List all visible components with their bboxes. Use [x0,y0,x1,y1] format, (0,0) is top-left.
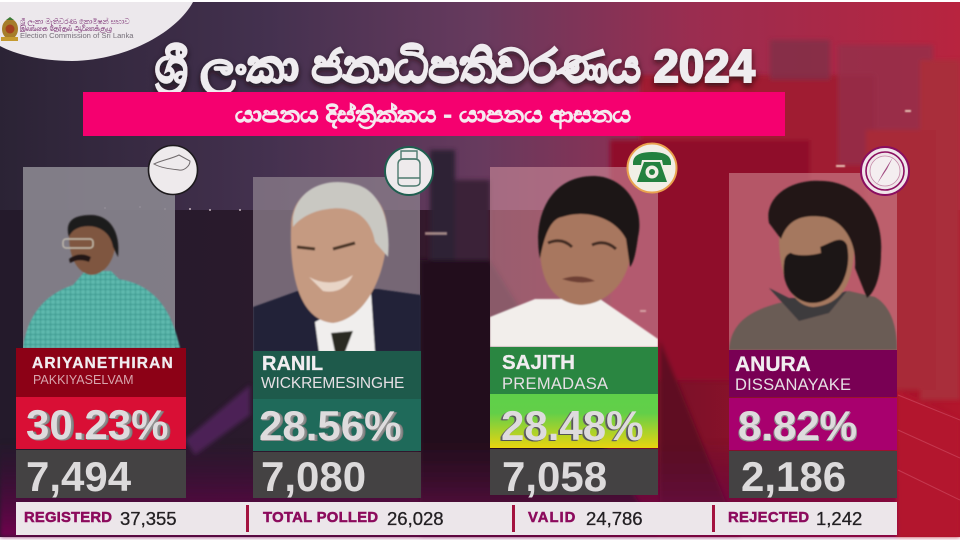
stat: total polled: TOTAL POLLED [263,510,378,526]
stats bar: 26,028 [387,508,444,529]
percentage 28.56%: 28.56% [259,402,401,449]
percentage 8.82%: 8.82% [738,402,857,449]
votes band [490,449,658,495]
stats bar: 1,242 [816,508,862,529]
logo panel: Election Commission [0,2,193,61]
icon: emblem [1,17,18,41]
icon: gas cylinder [384,146,434,196]
portrait: Sajith [490,167,658,347]
icon: telephone [626,142,678,194]
votes band [16,450,186,498]
logo text: இலங்கை தேர்தல் ஆணைக்குழு [20,24,112,33]
name band [729,350,897,397]
stats bar: 37,355 [120,508,177,529]
stat: rejected: REJECTED [728,510,809,526]
logo text: ශ්‍රී ලංකා මැතිවරණ කොමිෂන් සභාව [20,17,130,26]
stat: valid: VALID [528,510,576,526]
stats bar: 24,786 [586,508,643,529]
name band [253,351,421,399]
name: ANURA DISSANAYAKE: ANURA [735,353,811,376]
votes band [729,451,897,498]
percentage band [16,397,186,449]
name band [16,348,186,397]
percentage band [253,399,421,451]
percentage band [729,398,897,450]
portrait: Ariyanethiran [23,167,181,348]
logo text: Election Commission of Sri Lanka [20,31,134,40]
subtitle banner: යාපනය දිස්ත්‍රික්කය - යාපනය ආසනය [235,102,631,130]
title: ශ්‍රී ලංකා ජනාධිපතිවරණය 2024 [155,40,755,96]
stat: registered: REGISTERD [24,510,112,526]
percentage 30.23%: 30.23% [26,401,168,448]
portrait: Anura [729,173,897,350]
icon: compass [860,146,910,196]
votes 7,058: 7,058 [502,453,607,500]
card 2: Ranil: WICKREMESINGHE [261,375,404,392]
card 1: Ariyanethiran: PAKKIYASELVAM [33,373,134,387]
card 3: Sajith: PREMADASA [502,375,608,393]
logo text [20,17,134,40]
card 4: Anura: DISSANAYAKE [735,376,851,394]
horizon lights [104,206,241,211]
percentage band [490,394,658,448]
votes 7,494: 7,494 [26,453,131,500]
votes band [253,452,421,498]
percentage 28.48%: 28.48% [501,402,643,449]
icon: conch shell [148,144,198,196]
name band [490,347,658,394]
votes 7,080: 7,080 [261,453,366,500]
subtitle banner [83,92,785,136]
name: RANIL WICKREMESINGHE: RANIL [262,353,323,375]
name: SAJITH PREMADASA: SAJITH [502,351,575,374]
name: ARIYANETHIRAN PAKKIYASELVAM: ARIYANETHIRAN [32,355,174,372]
portrait: Ranil [253,177,421,351]
votes 2,186: 2,186 [741,453,846,500]
